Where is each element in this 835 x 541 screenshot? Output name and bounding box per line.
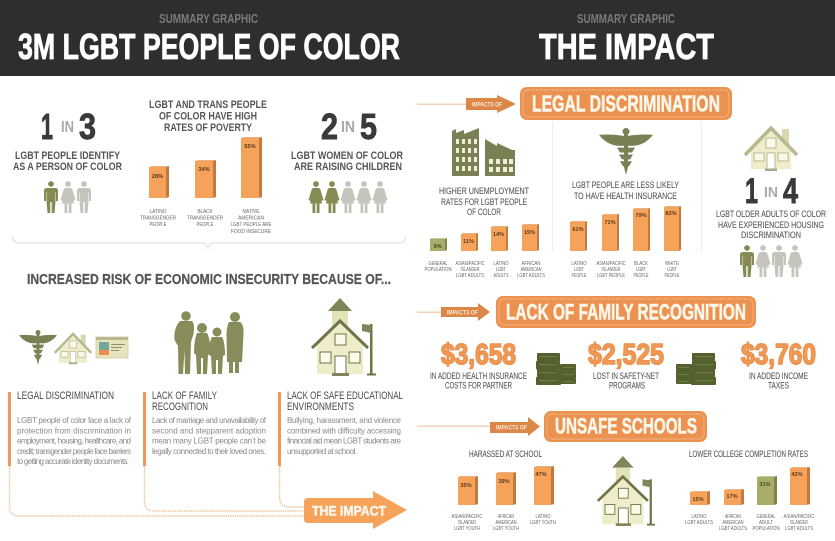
poverty chart bbox=[140, 99, 272, 235]
stat: $2,525: PROGRAMS bbox=[609, 380, 645, 392]
banner: legal discrimination: LEGAL DISCRIMINATION bbox=[532, 90, 720, 116]
poverty chart: OF COLOR HAVE HIGH bbox=[159, 110, 257, 122]
stat: 1 in 4: DISCRIMINATION bbox=[741, 230, 801, 241]
harassed chart: LGBT YOUTH bbox=[530, 520, 556, 526]
stat: 1 in 4: 4 bbox=[783, 172, 798, 211]
stat: $3,760: IN ADDED INCOME bbox=[749, 371, 808, 382]
banner: unsafe schools: UNSAFE SCHOOLS bbox=[555, 414, 697, 438]
harassed chart: 39% bbox=[498, 479, 510, 485]
icon: caduceus bbox=[599, 128, 653, 175]
health insurance chart: PEOPLE bbox=[634, 273, 649, 279]
stat: 1 in 3: 3 bbox=[79, 106, 96, 147]
unemployment chart: RATES FOR LGBT PEOPLE bbox=[441, 197, 527, 208]
health insurance chart: LGBT bbox=[574, 267, 584, 273]
college completion chart: 31% bbox=[759, 482, 771, 488]
college completion chart: 15% bbox=[692, 497, 704, 503]
text block: lack of safe educational environments: ENVIRONMENTS bbox=[287, 401, 354, 413]
poverty chart: PEOPLE bbox=[150, 222, 167, 228]
stat: $3,658: IN ADDED HEALTH INSURANCE bbox=[430, 371, 527, 382]
text block: lack of family recognition bbox=[143, 390, 267, 466]
health insurance chart: 82% bbox=[665, 211, 677, 217]
left title: 3M LGBT PEOPLE OF COLOR bbox=[18, 26, 400, 67]
stat: $3,760: TAXES bbox=[768, 380, 789, 392]
stat: $3,658: COSTS FOR PARTNER bbox=[445, 380, 512, 392]
icon: house bbox=[55, 334, 91, 364]
stat: 1 in 3: 1 bbox=[41, 106, 53, 147]
poverty chart: LGBT PEOPLE ARE bbox=[230, 222, 272, 228]
college completion chart: 42% bbox=[791, 472, 803, 478]
poverty chart: 34% bbox=[198, 167, 210, 173]
text block: lack of safe educational environments: LACK OF SAFE EDUCATIONAL bbox=[287, 390, 403, 402]
stat: 1 in 3: IN bbox=[61, 119, 74, 136]
left eyebrow: SUMMARY GRAPHIC bbox=[159, 11, 258, 26]
health insurance chart: TO HAVE HEALTH INSURANCE bbox=[574, 191, 677, 202]
stat: 1 in 3: LGBT PEOPLE IDENTIFY bbox=[15, 150, 121, 162]
college completion chart: LATINO bbox=[692, 514, 707, 520]
text block: legal discrimination: to getting accurate identity documents. bbox=[17, 457, 129, 466]
arrow: impacts of bbox=[490, 417, 540, 436]
harassed chart: LGBT YOUTH bbox=[454, 526, 480, 532]
stat: 1 in 3 bbox=[13, 106, 122, 213]
icon: caduceus bbox=[19, 330, 57, 365]
poverty chart: TRANSGENDER bbox=[187, 216, 223, 222]
text block: lack of safe educational environments: financial aid mean LGBT students are bbox=[287, 436, 402, 446]
stat: $2,525: $2,525 bbox=[588, 339, 664, 371]
harassed chart: AFRICAN bbox=[498, 514, 514, 520]
college completion chart: LGBT ADULTS bbox=[785, 526, 813, 532]
text block: lack of safe educational environments: combined with difficulty accessing bbox=[287, 426, 401, 436]
unemployment chart bbox=[424, 186, 545, 279]
right title: THE IMPACT bbox=[539, 26, 714, 67]
poverty chart: AMERICAN bbox=[238, 216, 264, 222]
health insurance chart: LGBT bbox=[667, 267, 677, 273]
arrow: impacts of: IMPACTS OF bbox=[496, 426, 527, 432]
connector lines bbox=[10, 466, 305, 516]
poverty chart: 28% bbox=[152, 174, 163, 180]
unemployment chart: OF COLOR bbox=[467, 207, 501, 218]
college completion chart: 17% bbox=[726, 494, 738, 500]
stat: $3,658 bbox=[430, 339, 527, 392]
health insurance chart: LATINO bbox=[572, 261, 587, 267]
poverty chart: BLACK bbox=[198, 209, 213, 215]
banner: legal discrimination bbox=[417, 87, 732, 120]
stat: $3,760 bbox=[741, 339, 816, 392]
text block: lack of family recognition: Lack of marriage and unavailability of bbox=[152, 416, 267, 425]
icon: house bbox=[745, 128, 797, 171]
stat: 1 in 4: 1 bbox=[745, 172, 758, 211]
arrow: impacts of: IMPACTS OF bbox=[447, 310, 478, 316]
right eyebrow: SUMMARY GRAPHIC bbox=[577, 11, 675, 26]
poverty chart: PEOPLE bbox=[196, 222, 214, 228]
arrow: impacts of bbox=[441, 303, 490, 321]
stat: 2 in 5: IN bbox=[341, 119, 355, 136]
stat: 1 in 3: AS A PERSON OF COLOR bbox=[13, 161, 122, 173]
unemployment chart: AFRICAN bbox=[522, 261, 540, 267]
poverty chart: RATES OF POVERTY bbox=[164, 122, 253, 134]
harassed chart: LGBT YOUTH bbox=[493, 526, 519, 532]
text block: legal discrimination: protection from discrimination in bbox=[17, 426, 131, 436]
banner: unsafe schools bbox=[417, 411, 707, 442]
icon: school bbox=[312, 298, 376, 376]
unemployment chart: LGBT ADULTS bbox=[517, 273, 545, 279]
poverty chart: LATINO bbox=[150, 209, 167, 215]
text block: lack of family recognition: RECOGNITION bbox=[152, 401, 208, 413]
college completion chart: GENERAL bbox=[756, 514, 776, 520]
health insurance chart: BLACK bbox=[634, 261, 648, 267]
stat: 2 in 5: 2 bbox=[321, 106, 338, 147]
icon: office buildings bbox=[452, 128, 515, 176]
health insurance chart: 71% bbox=[604, 220, 616, 226]
college completion chart: POPULATION bbox=[752, 526, 780, 532]
icon: id card bbox=[96, 337, 128, 358]
poverty chart: TRANSGENDER bbox=[140, 216, 176, 222]
stat: 2 in 5 bbox=[291, 106, 403, 213]
text block: legal discrimination: LGBT people of color face a lack of bbox=[17, 416, 132, 425]
stat: $2,525: LOST IN SAFETY-NET bbox=[593, 371, 659, 382]
text block: lack of safe educational environments: unsupported at school. bbox=[287, 447, 357, 456]
college completion chart: ASIAN/PACIFIC bbox=[784, 514, 814, 520]
section heading: INCREASED RISK OF ECONOMIC INSECURITY BECAUSE OF... bbox=[27, 272, 391, 288]
icon: money stack bbox=[536, 353, 576, 385]
banner: lack of family recognition bbox=[417, 296, 756, 328]
unemployment chart: LATINO bbox=[494, 261, 509, 267]
stat: 2 in 5: ARE RAISING CHILDREN bbox=[294, 161, 402, 173]
icon: family bbox=[174, 311, 244, 374]
arrow: the impact: THE IMPACT bbox=[312, 502, 386, 518]
health insurance chart: 61% bbox=[572, 227, 584, 233]
text block: lack of family recognition: second and stepparent adoption bbox=[152, 426, 266, 436]
unemployment chart: 15% bbox=[524, 230, 535, 236]
stat: $2,525 bbox=[588, 339, 664, 392]
stat: 1 in 4 bbox=[716, 172, 826, 277]
text block: lack of safe educational environments: Bullying, harassment, and violence bbox=[287, 416, 402, 425]
health insurance chart: WHITE bbox=[665, 261, 679, 267]
icon: money stack bbox=[676, 353, 716, 385]
unemployment chart: AMERICAN bbox=[520, 267, 542, 273]
unemployment chart: 11% bbox=[463, 239, 474, 245]
poverty chart: LGBT AND TRANS PEOPLE bbox=[149, 99, 267, 111]
college completion chart: AFRICAN bbox=[725, 514, 741, 520]
stat: 2 in 5: LGBT WOMEN OF COLOR bbox=[291, 150, 403, 162]
health insurance chart: ISLANDER bbox=[602, 267, 620, 273]
unemployment chart: ADULTS bbox=[494, 273, 509, 279]
harassed chart: AMERICAN bbox=[496, 520, 516, 526]
arrow: impacts of bbox=[466, 95, 516, 113]
health insurance chart: 79% bbox=[635, 213, 647, 219]
arrow: impacts of: IMPACTS OF bbox=[472, 102, 502, 108]
harassed chart: 47% bbox=[535, 472, 547, 478]
stat: $3,760: $3,760 bbox=[741, 339, 816, 371]
poverty chart: NATIVE bbox=[242, 209, 260, 215]
unemployment chart: ASIAN/PACIFIC bbox=[456, 261, 484, 267]
harassed chart: LATINO bbox=[536, 514, 551, 520]
text block: legal discrimination: LEGAL DISCRIMINATION bbox=[17, 390, 114, 402]
text block: lack of family recognition: LACK OF FAMILY bbox=[152, 390, 217, 402]
college completion chart: LGBT ADULTS bbox=[719, 526, 747, 532]
unemployment chart: 9% bbox=[433, 244, 442, 250]
health insurance chart: ASIAN/PACIFIC bbox=[596, 261, 626, 267]
text block: legal discrimination: employment, housing, healthcare, and bbox=[17, 436, 131, 446]
text block: legal discrimination: credit; transgender people face barriers bbox=[17, 447, 131, 456]
text block: lack of family recognition: mean many LGBT people can’t be bbox=[152, 436, 267, 446]
college completion chart: ADULT bbox=[759, 520, 773, 526]
college completion chart bbox=[685, 449, 814, 532]
unemployment chart: LGBT bbox=[496, 267, 506, 273]
health insurance chart bbox=[570, 180, 681, 279]
text block: legal discrimination bbox=[8, 390, 132, 466]
stat: $3,658: $3,658 bbox=[441, 339, 516, 371]
health insurance chart: LGBT PEOPLE ARE LESS LIKELY bbox=[572, 180, 679, 191]
unemployment chart: GENERAL bbox=[428, 261, 448, 267]
harassed chart: 35% bbox=[460, 483, 472, 489]
college completion chart: ISLANDER bbox=[790, 520, 808, 526]
harassed chart bbox=[452, 449, 556, 532]
college completion chart: LGBT ADULTS bbox=[685, 520, 713, 526]
health insurance chart: LGBT bbox=[636, 267, 646, 273]
harassed chart: ASIAN/PACIFIC bbox=[452, 514, 482, 520]
unemployment chart: ISLANDER bbox=[460, 267, 480, 273]
harassed chart: HARASSED AT SCHOOL bbox=[469, 449, 542, 460]
unemployment chart: LGBT ADULTS bbox=[456, 273, 484, 279]
icon: women 2 of 5 bbox=[308, 181, 388, 213]
icon: people 1 of 3 bbox=[44, 181, 91, 213]
health insurance chart: PEOPLE bbox=[572, 273, 587, 279]
stat: 1 in 4: IN bbox=[764, 184, 778, 201]
icon: school bbox=[598, 456, 655, 526]
unemployment chart: 14% bbox=[493, 232, 504, 238]
college completion chart: AMERICAN bbox=[722, 520, 744, 526]
unemployment chart: HIGHER UNEMPLOYMENT bbox=[439, 186, 529, 197]
header band bbox=[0, 0, 835, 76]
poverty chart: FOOD INSECURE bbox=[231, 229, 271, 235]
icon: people 1 of 4 bbox=[740, 245, 802, 277]
stat: 2 in 5: 5 bbox=[360, 106, 377, 147]
health insurance chart: LGBT PEOPLE bbox=[597, 273, 625, 279]
harassed chart: ISLANDER bbox=[458, 520, 476, 526]
poverty chart: 55% bbox=[244, 144, 256, 150]
text block: lack of safe educational environments bbox=[278, 390, 403, 466]
arrow: the impact bbox=[304, 491, 407, 529]
text block: lack of family recognition: legally connected to their loved ones. bbox=[152, 447, 266, 456]
health insurance chart: PEOPLE bbox=[664, 273, 680, 279]
unemployment chart: POPULATION bbox=[424, 267, 452, 273]
